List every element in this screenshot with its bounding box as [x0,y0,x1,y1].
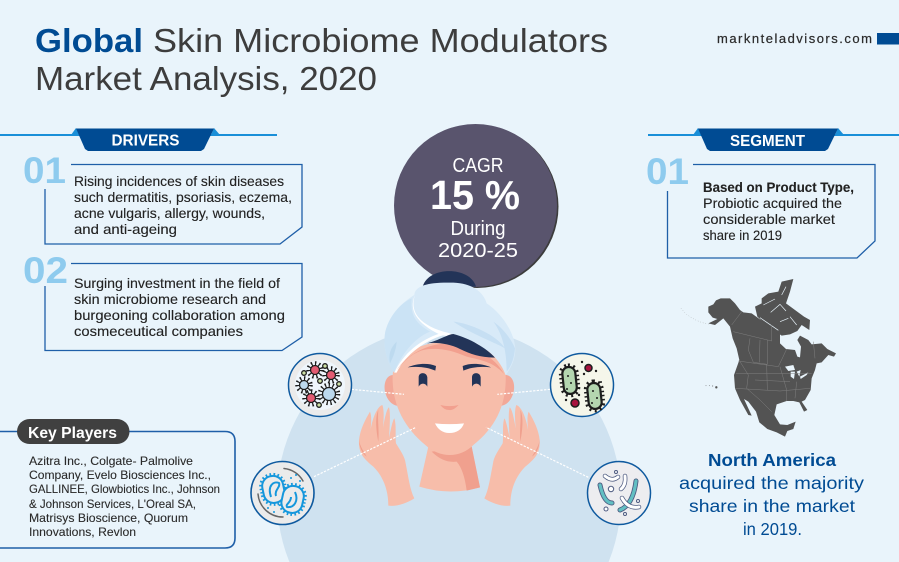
Hawaii [706,385,717,388]
dashed pointers [314,389,588,477]
key players panel: GALLINEE, Glowbiotics Inc., Johnson [29,482,220,496]
segment heading: SEGMENT [730,133,806,150]
eyes [419,373,481,387]
mainland [708,298,836,437]
Aleutian islands [681,308,708,324]
icon: rod bacteria [588,462,650,524]
hair [397,334,504,374]
drivers heading [0,128,277,151]
driver 01: Rising incidences of skin diseases [74,173,284,189]
icon: green bacteria [550,354,614,416]
North America text: share in the market [689,496,855,516]
segment 01: 01 [646,151,689,192]
background circle behind woman [277,326,621,562]
segment 01: considerable market [703,211,835,227]
key players panel: Company, Evelo Biosciences Inc., [29,468,211,482]
ears [385,375,514,406]
towel [385,283,515,375]
lakes [785,365,808,379]
CAGR circle: 15 % [430,172,520,218]
key players panel: Key Players [28,425,117,442]
driver 02: 02 [23,250,68,291]
segment 01: Based on Product Type, [703,179,854,195]
North America text: in 2019. [743,519,802,539]
mouth [435,423,464,433]
website brand: marknteladvisors.com [717,31,873,46]
eyebrows [408,364,491,371]
key players panel [0,419,235,548]
driver 01: 01 [23,150,66,191]
woman illustration [314,271,588,506]
face [393,342,506,455]
driver 02: cosmeceutical companies [74,323,243,339]
drivers heading: DRIVERS [112,132,180,150]
driver 01 [23,150,302,244]
title: Global [35,22,143,59]
segment heading [648,128,899,151]
segment 01: share in 2019 [703,227,782,243]
driver 01: and anti-ageing [74,221,177,237]
driver 01: acne vulgaris, allergy, wounds, [74,205,265,221]
CAGR circle [394,124,558,288]
North America text: acquired the majority [679,473,864,493]
right hand [484,405,540,506]
segment 01 [646,151,875,258]
bun [423,271,476,287]
key players panel: Innovations, Revlon [29,525,136,539]
key players panel: & Johnson Services, L'Oreal SA, [29,497,196,511]
driver 01: such dermatitis, psoriasis, eczema, [74,189,292,205]
arctic islands [755,279,810,336]
North America text [679,450,864,539]
CAGR circle: During [450,217,506,240]
CAGR circle: CAGR [452,154,504,177]
segment 01: Probiotic acquired the [703,195,842,211]
driver 02: Surging investment in the field of [74,275,280,291]
key players panel: Matrisys Bioscience, Quorum [29,511,188,525]
left hand [359,405,414,506]
title: Skin Microbiome Modulators [153,22,608,59]
nose [440,405,459,410]
neck [419,447,480,492]
key players panel: Azitra Inc., Colgate- Palmolive [29,454,193,468]
driver 02 [23,250,302,350]
hand shading [359,410,540,457]
CAGR circle: 2020-25 [438,239,518,262]
icon: viruses [288,354,352,416]
map: North America [681,279,836,437]
icon: blue bacteria [251,462,314,524]
title: Market Analysis, 2020 [35,60,377,97]
driver 02: skin microbiome research and [74,291,266,307]
title [35,22,608,97]
North America text: North America [708,450,836,470]
driver 02: burgeoning collaboration among [74,307,285,323]
